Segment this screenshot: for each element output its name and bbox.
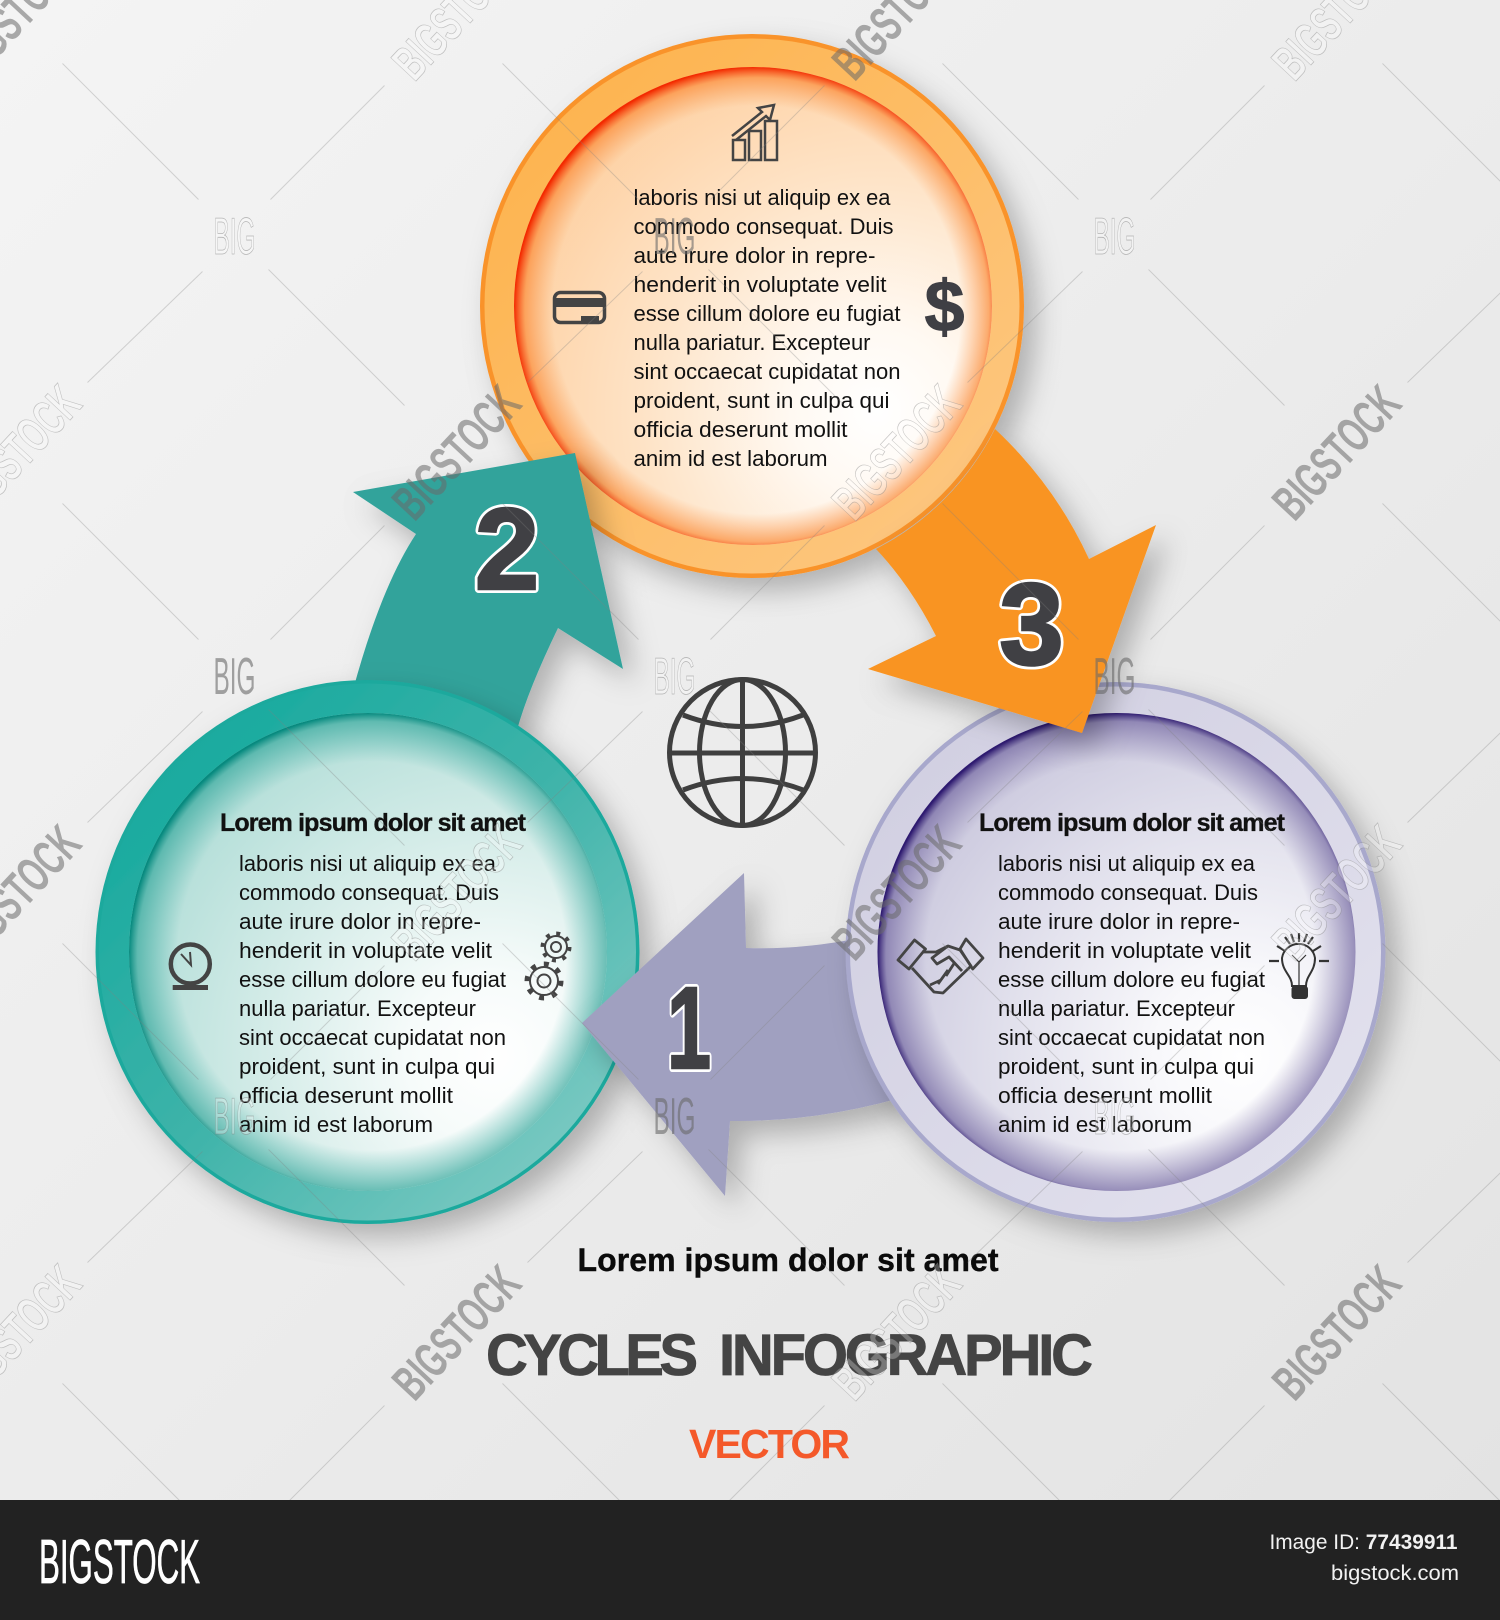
text block: purple circle body (998, 851, 1266, 1137)
watermark overlay: BIGSTOCK (822, 375, 972, 530)
footer logo: BIGSTOCK (39, 1528, 200, 1597)
title: INFOGRAPHIC (719, 1323, 1093, 1388)
watermark overlay: BIGSTOCK (382, 815, 532, 970)
subtitle: Lorem ipsum dolor sit amet (578, 1242, 999, 1278)
number 2: 2 (475, 484, 539, 614)
text block: purple circle body: commodo consequat. Duis (998, 880, 1258, 905)
text block: orange circle body: nulla pariatur. Excepteur (634, 330, 871, 355)
orange circle face (514, 67, 992, 545)
text block: teal circle body: commodo consequat. Duis (239, 880, 499, 905)
icon: credit card (554, 292, 604, 323)
title: CYCLES (486, 1323, 698, 1388)
watermark overlay: BIG (1094, 1088, 1136, 1146)
orange circle rim (480, 34, 1024, 578)
text block: purple circle body: esse cillum dolore eu fugiat (998, 967, 1266, 992)
heading: purple circle: Lorem ipsum dolor sit amet (979, 809, 1286, 837)
text block: orange circle body: aute irure dolor in repre- (634, 243, 876, 268)
icon: handshake (898, 939, 983, 993)
watermark overlay: BIGSTOCK (822, 815, 972, 970)
vector label: VECTOR (689, 1421, 850, 1467)
text block: teal circle body: sint occaecat cupidatat non (239, 1025, 506, 1050)
watermark overlay: BIGSTOCK (382, 1255, 532, 1410)
watermark overlay: BIG (1094, 648, 1136, 706)
text block: purple circle body: officia deserunt mollit (998, 1083, 1213, 1108)
watermark overlay: BIGSTOCK (1262, 375, 1412, 530)
watermark overlay: BIG (654, 208, 696, 266)
text block: purple circle body: nulla pariatur. Excepteur (998, 996, 1235, 1021)
watermark overlay: BIG (214, 648, 256, 706)
teal circle rim (96, 680, 640, 1224)
number 1: 1 (667, 963, 711, 1093)
text block: orange circle body: officia deserunt mollit (634, 417, 848, 442)
icon: globe (670, 680, 816, 826)
arrow 2: teal (353, 453, 623, 730)
panel: orange circle (480, 34, 1024, 578)
icon: gears (527, 934, 570, 998)
title (486, 1323, 1093, 1388)
text block: orange circle body: laboris nisi ut aliquip ex ea (634, 185, 891, 210)
text block: teal circle body: esse cillum dolore eu fugiat (239, 967, 507, 992)
heading: teal circle: Lorem ipsum dolor sit amet (220, 809, 527, 837)
number 3: 3 (999, 559, 1064, 689)
teal circle face (129, 713, 607, 1191)
panel: purple circle (846, 682, 1386, 1222)
text block: teal circle body (239, 851, 507, 1137)
arrow 1: purple (582, 873, 900, 1196)
watermark overlay: BIG (654, 648, 696, 706)
text block: teal circle body: proident, sunt in culpa qui (239, 1054, 495, 1079)
icon: dollar sign: $ (924, 267, 965, 347)
number 3: 3 (999, 559, 1064, 689)
footer bar (0, 1500, 1500, 1620)
number 1: 1 (667, 963, 711, 1093)
text block: purple circle body: sint occaecat cupidatat non (998, 1025, 1265, 1050)
text block: purple circle body: henderit in voluptate velit (998, 938, 1252, 963)
text block: purple circle body: anim id est laborum (998, 1112, 1192, 1137)
watermark overlay: BIGSTOCK (1262, 1255, 1412, 1410)
text block: purple circle body: laboris nisi ut aliquip ex ea (998, 851, 1255, 876)
watermark overlay: BIG (214, 1088, 256, 1146)
text block: teal circle body: laboris nisi ut aliquip ex ea (239, 851, 496, 876)
watermark overlay: BIGSTOCK (1262, 815, 1412, 970)
panel: teal circle (96, 680, 640, 1224)
icon: growth chart (732, 105, 777, 160)
icon: light bulb (1269, 933, 1329, 998)
purple circle rim (846, 682, 1386, 1222)
text block: orange circle body: sint occaecat cupidatat non (634, 359, 900, 384)
watermark overlay: BIG (214, 208, 256, 266)
number 2: 2 (475, 484, 539, 614)
text block: orange circle body: anim id est laborum (634, 446, 828, 471)
watermark overlay: BIG (1094, 208, 1136, 266)
site url: bigstock.com (1331, 1562, 1459, 1585)
number 1 (667, 963, 711, 1093)
watermark overlay: BIGSTOCK (382, 375, 532, 530)
text block: orange circle body: henderit in voluptate velit (634, 272, 887, 297)
text block: orange circle body: commodo consequat. Duis (634, 214, 894, 239)
text block: teal circle body: henderit in voluptate velit (239, 938, 493, 963)
text block: purple circle body: proident, sunt in culpa qui (998, 1054, 1254, 1079)
arrow 3: orange (868, 429, 1156, 733)
watermark overlay: BIG (654, 1088, 696, 1146)
text block: teal circle body: aute irure dolor in repre- (239, 909, 481, 934)
text block: teal circle body: anim id est laborum (239, 1112, 433, 1137)
watermark overlay: BIGSTOCK (822, 1255, 972, 1410)
icon: clock (171, 944, 210, 990)
text block: orange circle body: esse cillum dolore eu fugiat (634, 301, 901, 326)
text block: purple circle body: aute irure dolor in repre- (998, 909, 1240, 934)
text block: teal circle body: nulla pariatur. Excepteur (239, 996, 476, 1021)
text block: orange circle body: proident, sunt in culpa qui (634, 388, 890, 413)
text block: teal circle body: officia deserunt mollit (239, 1083, 454, 1108)
image id: Image ID: 77439911 (1270, 1531, 1458, 1554)
text block: orange circle body (634, 185, 901, 471)
purple circle face (878, 713, 1356, 1191)
